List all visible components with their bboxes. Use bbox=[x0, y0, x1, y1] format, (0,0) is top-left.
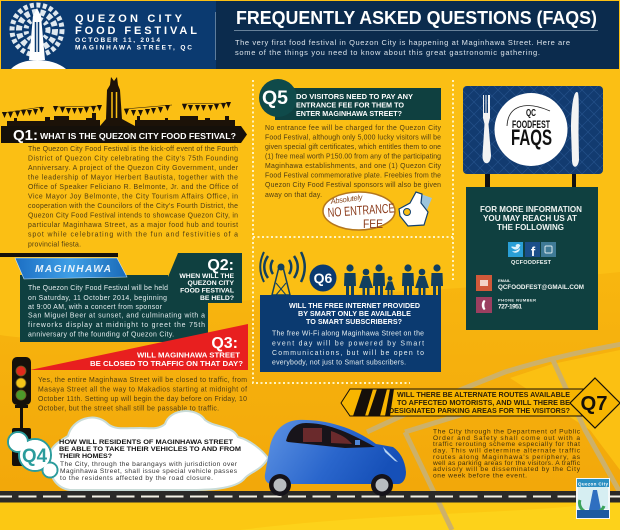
Q1 heading banner: Q1: bbox=[13, 127, 38, 144]
phone contact: PHONE NUMBER bbox=[498, 298, 536, 302]
Q7 heading text bbox=[389, 392, 570, 415]
Q5 answer text: Food Festival, although only 5,000 lucky visitors will be bbox=[265, 134, 441, 142]
Q2 heading: QUEZON CITY bbox=[188, 280, 234, 287]
Q2 answer text: on Saturday, 11 October 2014, beginning bbox=[28, 295, 167, 302]
Q3 heading with red beam: WILL MAGINHAWA STREET bbox=[137, 350, 240, 360]
Q7 answer text: traffic rerouting scheme especially for that bbox=[433, 441, 580, 448]
Q5 heading: DO VISITORS NEED TO PAY ANY bbox=[296, 94, 413, 101]
Q7 answer text: Order and Safety shall come out with a bbox=[433, 435, 580, 442]
Q5 heading: Q5 bbox=[262, 88, 288, 109]
Q1 answer text: Anniversary. A project of the Quezon City Government, under bbox=[28, 165, 239, 172]
Q4 heading: HOW WILL RESIDENTS OF MAGINHAWA STREET bbox=[59, 439, 234, 446]
no entrance fee badge: FEE bbox=[363, 217, 383, 231]
icon: knife bbox=[571, 92, 579, 167]
Q7 answer text bbox=[432, 428, 581, 480]
Q1 answer text: District of Quezon City celebrating the City's 75th Founding bbox=[28, 156, 238, 162]
Q6 answer text: Communications, but will be open to bbox=[272, 350, 424, 357]
plate title: QC bbox=[526, 108, 536, 119]
Q1 heading banner: WHAT IS THE QUEZON CITY FOOD FESTIVAL? bbox=[40, 131, 236, 141]
festival name: QUEZON CITY bbox=[75, 13, 183, 25]
Q2 heading: FOOD FESTIVAL bbox=[180, 288, 234, 294]
festival name: FOOD FESTIVAL bbox=[75, 25, 197, 37]
Q6 graphic row bbox=[260, 252, 443, 295]
Q4 heading bbox=[59, 439, 241, 460]
Q6 panel: BY SMART ONLY BE AVAILABLE bbox=[298, 311, 411, 318]
Q7 diamond: Q7 bbox=[580, 393, 608, 415]
Q7 diamond bbox=[570, 378, 620, 428]
Q5 answer text: away on that day. bbox=[265, 192, 322, 199]
no entrance fee badge: NO ENTRANCE bbox=[327, 200, 395, 220]
email contact: QCFOODFEST@GMAIL.COM bbox=[498, 284, 584, 291]
Q4 answer text: Maginhawa Street, shall issue special vehicle passes bbox=[60, 468, 238, 475]
icon: traffic light bbox=[12, 357, 31, 466]
Q4 answer text: The City, through the barangays with jurisdiction over bbox=[60, 461, 238, 468]
Quezon City 75th logo bbox=[576, 478, 610, 519]
Q1 answer text: provincial fiesta. bbox=[28, 242, 81, 248]
Q5 heading: ENTER MAGINHAWA STREET? bbox=[296, 111, 402, 118]
intro text: The very first food festival in Quezon City is happening at Maginhawa Street. Here are bbox=[235, 38, 570, 47]
no entrance fee badge bbox=[323, 192, 432, 231]
Q3 heading with red beam: Q3: bbox=[211, 335, 238, 352]
Q7 heading text: DESIGNATED PARKING AREAS FOR THE VISITORS? bbox=[389, 408, 570, 415]
road bbox=[0, 491, 620, 502]
dotted dividers bbox=[253, 80, 453, 383]
Q5 heading bbox=[259, 79, 441, 120]
icon: fork bbox=[482, 95, 491, 163]
Q2 answer text: at 9:00 AM, with a concert from sponsor bbox=[28, 304, 163, 311]
Q4 badge bbox=[8, 432, 58, 478]
contact heading: YOU MAY REACH US AT bbox=[483, 214, 577, 223]
page title: FREQUENTLY ASKED QUESTIONS (FAQS) bbox=[236, 8, 597, 28]
Q2 answer box bbox=[20, 275, 208, 342]
Q3 answer text: October, but the street shall still be passable to traffic. bbox=[38, 406, 219, 412]
Q6 badge bbox=[310, 264, 336, 292]
Q2 answer text: anniversary of the founding of Quezon City. bbox=[28, 332, 174, 338]
Q1 answer text: the leadership of Mayor Herbert Bautista, together with the bbox=[28, 174, 238, 182]
Q3 answer text: Yes, the entire Maginhawa Street will be closed to traffic, from bbox=[38, 377, 247, 384]
Q1 answer text: Office of Speaker Feliciano R. Belmonte, Jr. and the Office of bbox=[28, 184, 238, 191]
contact panel bbox=[466, 187, 598, 330]
plate title: FOODFEST bbox=[512, 119, 550, 131]
Q4 heading: THEIR HOMES? bbox=[59, 453, 112, 460]
street sign bbox=[15, 258, 127, 279]
Q7 answer text: one week before the event. bbox=[433, 472, 527, 480]
car wheels bbox=[269, 474, 393, 496]
Q5 answer text: (1) free meal worth P150.00 from any of the participating bbox=[265, 154, 441, 160]
Q6 answer text: everybody, not just to Smart subscribers. bbox=[272, 360, 406, 366]
Q7 answer text: The City through the Department of Public bbox=[433, 428, 581, 436]
Q6 panel: WILL THE FREE INTERNET PROVIDED bbox=[289, 303, 420, 310]
Q7 heading text: WILL THERE BE ALTERNATE ROUTES AVAILABLE bbox=[397, 392, 570, 399]
Q7 heading text: TO AFFECTED MOTORISTS, AND WILL THERE BE bbox=[397, 400, 570, 407]
header bbox=[1, 1, 619, 69]
social handle: QCFOODFEST bbox=[511, 260, 552, 266]
Q2 heading: Q2: bbox=[207, 257, 234, 274]
Q5 answer text bbox=[265, 125, 442, 199]
Q4 answer text: to the residents affected by the road closure. bbox=[60, 475, 213, 482]
Q5 heading: ENTRANCE FEE FOR THEM TO bbox=[296, 102, 405, 110]
Q4 cloud panel bbox=[8, 411, 268, 490]
Q1 answer text bbox=[28, 146, 239, 248]
plate title: FAQS bbox=[511, 125, 552, 150]
Q1 answer text: The Quezon City Food Festival is the kick-off event of the Fourth bbox=[28, 146, 238, 153]
Q2 answer text: San Miguel Beer at sunset, and culminating with a bbox=[28, 312, 205, 320]
icon: people bbox=[344, 264, 443, 295]
Q1 answer text: particular Maginhawa Street, as a major food hub and tourist bbox=[28, 222, 238, 229]
Q2 answer text bbox=[28, 285, 205, 338]
Q3 answer text: October 11th. Setting up will begin the day before on Friday, 10 bbox=[38, 396, 247, 403]
email contact: EMAIL bbox=[498, 278, 511, 283]
Q6 answer text: The free Wi-Fi along Maginhawa Street on the bbox=[272, 330, 424, 338]
Q6 answer text bbox=[272, 330, 424, 366]
social icons: f bbox=[531, 244, 536, 259]
Q7 answer text: well as parking areas for the visitors. A traffic bbox=[432, 460, 581, 467]
Q2 heading: BE HELD? bbox=[200, 295, 234, 302]
Q3 answer text bbox=[38, 377, 247, 412]
Q7 road sign heading bbox=[341, 378, 620, 428]
cloud shape bbox=[47, 411, 268, 490]
phone contact: 727-1951 bbox=[498, 304, 522, 310]
Q2 answer text: fireworks display at midnight to greet the 75th bbox=[28, 322, 205, 329]
Q1 heading banner bbox=[1, 126, 247, 144]
festival name: OCTOBER 11, 2014 bbox=[75, 37, 160, 44]
street sign: MAGINHAWA bbox=[35, 264, 111, 275]
Q6 panel bbox=[260, 295, 441, 372]
intro text bbox=[235, 38, 570, 57]
contact heading bbox=[480, 205, 582, 232]
Q1 answer text: Vice Mayor Joy Belmonte, the City Tourism Affairs Office, in bbox=[28, 194, 238, 200]
contact heading: FOR MORE INFORMATION bbox=[480, 205, 582, 214]
Q2 answer text: The Quezon City Food Festival will be held bbox=[28, 285, 168, 292]
Q3 heading with red beam bbox=[30, 324, 248, 370]
Q4 badge: Q4 bbox=[22, 446, 47, 467]
car illustration bbox=[265, 420, 406, 496]
Q4 heading: BE ABLE TO TAKE THEIR VEHICLES TO AND FROM bbox=[59, 446, 241, 453]
email contact bbox=[476, 275, 584, 291]
Q1 skyline silhouette bbox=[2, 77, 235, 126]
plate title bbox=[511, 108, 552, 150]
Q1 answer text: spot while celebrating with the fun and festivities of a bbox=[28, 232, 238, 238]
phone contact bbox=[476, 297, 536, 313]
Q7 answer text: advisory will be disseminated by the City bbox=[433, 466, 581, 473]
Q3 answer text: Masaya Street all the way to Makadios starting at midnight of bbox=[38, 386, 247, 394]
Q2 heading: WHEN WILL THE bbox=[179, 273, 234, 280]
social icons bbox=[508, 242, 556, 259]
Q2 panel bbox=[0, 253, 242, 342]
plate bbox=[494, 93, 568, 166]
Q7 answer text: routes along Maginhawa's periphery, as bbox=[433, 454, 581, 461]
Q6 answer text: event day will be powered by Smart bbox=[272, 340, 424, 348]
intro text: some of the things you need to know about this great gastronomic gathering. bbox=[235, 48, 540, 57]
Q4 answer text bbox=[60, 461, 238, 482]
Q1 answer text: Quezon City Food Festival intends to showcase Quezon City, in bbox=[28, 212, 238, 220]
Q6 panel: TO SMART SUBSCRIBERS? bbox=[306, 319, 402, 326]
Q5 answer text: given special gift certificates, which entitles them to one bbox=[265, 144, 441, 151]
festival name: MAGINHAWA STREET, QC bbox=[75, 44, 192, 52]
contact heading: THE FOLLOWING bbox=[497, 223, 564, 232]
festival logo bbox=[11, 5, 66, 69]
Q5 answer text: Maginhawa establishments, and one (1) Quezon City bbox=[265, 163, 442, 170]
Quezon City 75th logo: Quezon City bbox=[578, 482, 608, 486]
icon: signal tower bbox=[260, 252, 305, 295]
Q1 answer text: cooperation with the Councilors of the City's Fourth District, the bbox=[28, 203, 238, 210]
Q2 heading bbox=[179, 257, 234, 302]
Q5 answer text: Food Festival commemorative plate. Freebies from the bbox=[265, 172, 441, 180]
Q7 answer text: day. This will determine alternate traffic bbox=[433, 448, 581, 454]
map roads bbox=[367, 344, 620, 530]
no entrance fee badge: Absolutely bbox=[329, 192, 364, 206]
Q5 answer text: No entrance fee will be charged for the Quezon City bbox=[265, 125, 442, 132]
Q3 heading with red beam: BE CLOSED TO TRAFFIC ON THAT DAY? bbox=[90, 359, 243, 368]
icon: OK hand bbox=[399, 192, 432, 226]
Q6 badge: Q6 bbox=[314, 270, 333, 286]
festival name bbox=[75, 13, 197, 52]
Q5 answer text: Quezon City Food Festival sponsors will also be given bbox=[265, 182, 441, 189]
FAQ placemat sign bbox=[463, 86, 603, 189]
